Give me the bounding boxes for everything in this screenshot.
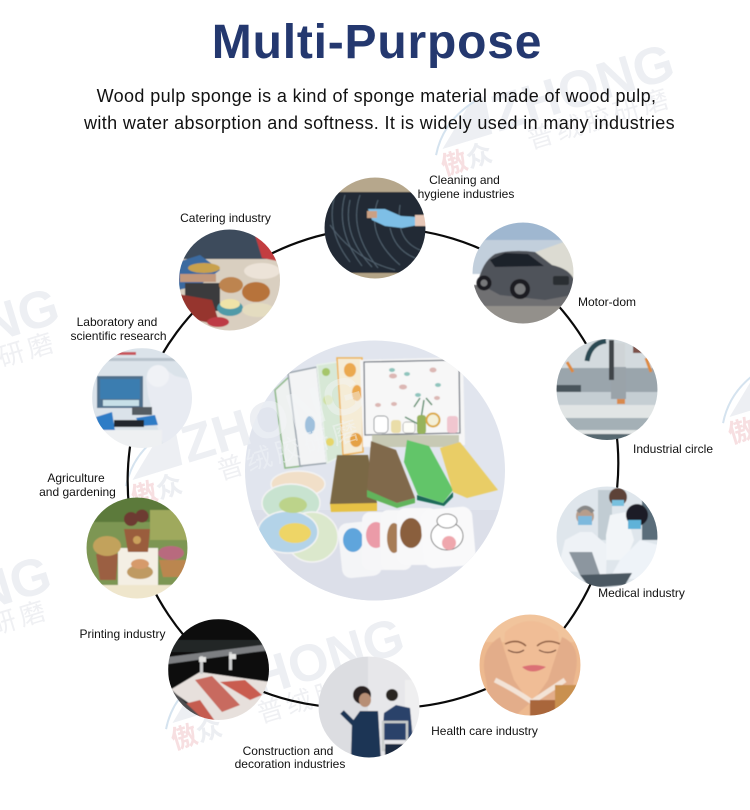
- label: laboratory: scientific research: [70, 329, 167, 343]
- sponge: brown on green: [367, 488, 415, 508]
- sponge: brown on yellow: [330, 503, 377, 512]
- watermark: top right: ZHONG: [485, 33, 681, 143]
- card: deer print: [360, 357, 465, 447]
- label: construction: decoration industries: [235, 757, 345, 771]
- watermark: middle: 普绒胶研磨: [213, 413, 366, 486]
- photo: laboratory: [92, 348, 193, 449]
- label: construction: Construction and: [243, 744, 333, 758]
- card: orange: [337, 358, 363, 455]
- intro text: Wood pulp sponge is a kind of sponge material made of wood pulp,: [97, 86, 656, 106]
- watermark: lower middle: 众: [192, 711, 226, 748]
- center photo: sponges and printed cards: [245, 340, 505, 600]
- character cards: [337, 520, 383, 579]
- label: catering: Catering industry: [180, 211, 271, 225]
- label: medical: Medical industry: [598, 586, 685, 600]
- photo: motor-dom: [472, 222, 575, 325]
- sponge: yellow: [440, 442, 498, 498]
- watermark: top right: [421, 33, 687, 182]
- label: laboratory: [70, 315, 167, 343]
- label: agriculture: Agriculture: [47, 471, 105, 485]
- label: cleaning: hygiene industries: [418, 187, 514, 201]
- watermark: top right: 普绒胶研磨: [523, 82, 676, 155]
- label: industrial: Industrial circle: [633, 442, 713, 456]
- label: laboratory: Laboratory and: [77, 315, 157, 329]
- label: agriculture: and gardening: [39, 485, 116, 499]
- watermark: lower middle: 傲: [167, 719, 201, 755]
- watermark over photo: 普绒胶研磨: [213, 413, 366, 486]
- watermark: top right: 傲: [437, 145, 471, 181]
- watermark: middle: 傲: [127, 476, 161, 512]
- intro text: with water absorption and softness. It is widely used in many industries: [83, 113, 675, 133]
- photo: printing: [168, 619, 270, 721]
- photo: agriculture and gardening: [86, 497, 188, 600]
- card: blue train: [288, 367, 327, 466]
- card: green fruit: [317, 362, 343, 463]
- photo: catering: [178, 229, 282, 332]
- watermark: middle: ZHONG: [175, 364, 371, 474]
- label: printing: Printing industry: [79, 627, 166, 641]
- card: green border: [275, 376, 302, 468]
- title: Multi-Purpose: [212, 16, 542, 69]
- watermark: top right: 众: [462, 137, 496, 174]
- watermark over photo: [274, 378, 362, 463]
- watermark: lower middle: ZHONG: [215, 607, 411, 717]
- photo: medical: [556, 486, 658, 589]
- photo: construction and decoration: [318, 656, 420, 760]
- label: health care: Health care industry: [431, 724, 538, 738]
- photo: industrial: [556, 338, 658, 442]
- photo: cleaning and hygiene: [324, 177, 427, 280]
- label: cleaning: [418, 173, 514, 201]
- sponge: green: [417, 492, 453, 506]
- connecting ring: [128, 228, 618, 708]
- watermark: middle: [111, 364, 377, 513]
- discs: [258, 471, 338, 562]
- watermark: lower middle: [151, 607, 417, 756]
- photo: health care face: [479, 614, 581, 717]
- label: agriculture: [39, 471, 116, 499]
- label: construction: [235, 744, 345, 771]
- watermark: right edge: [711, 364, 750, 450]
- intro text: [83, 86, 675, 133]
- label: cleaning: Cleaning and: [429, 173, 500, 187]
- watermark: middle: 众: [152, 468, 186, 505]
- watermark over photo: ZHONG: [175, 364, 371, 474]
- label: motor-dom: Motor-dom: [578, 295, 636, 309]
- watermark: lower middle: 普绒胶研磨: [253, 656, 406, 729]
